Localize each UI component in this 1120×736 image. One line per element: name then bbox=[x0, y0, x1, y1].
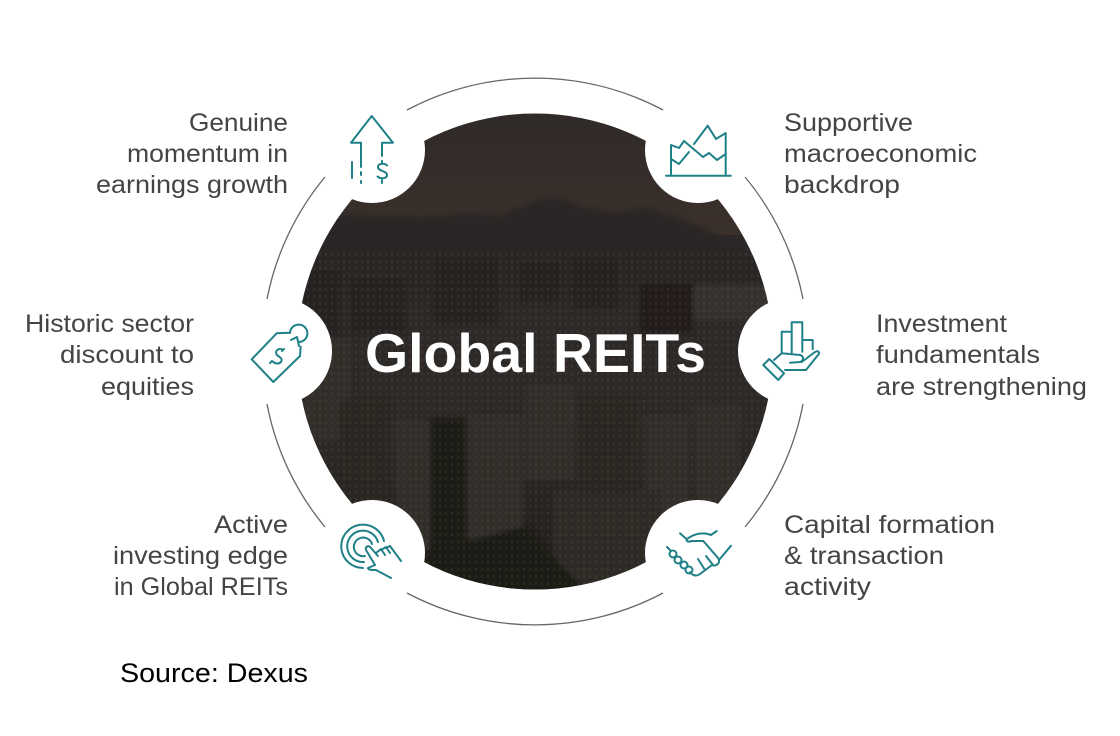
label: capital formation: & transaction bbox=[784, 542, 944, 570]
label: earnings growth: momentum in bbox=[127, 140, 288, 168]
label: active investing: Active bbox=[214, 511, 288, 539]
label: earnings growth: Genuine bbox=[189, 109, 288, 137]
label: investment fundamentals: Investment bbox=[876, 310, 1007, 338]
label: earnings growth: earnings growth bbox=[96, 171, 288, 199]
label: capital formation: activity bbox=[784, 573, 872, 601]
label: macroeconomic backdrop: backdrop bbox=[784, 171, 900, 199]
icon: handshake bbox=[667, 531, 731, 575]
outer ring arcs bbox=[267, 78, 803, 625]
central photo circle bbox=[290, 110, 783, 595]
label: sector discount: equities bbox=[101, 373, 194, 401]
label: macroeconomic backdrop: macroeconomic bbox=[784, 140, 977, 168]
label: macroeconomic backdrop: Supportive bbox=[784, 109, 913, 137]
label: investment fundamentals: are strengthening bbox=[876, 373, 1087, 401]
icon: chart bbox=[666, 126, 731, 176]
label: capital formation bbox=[784, 511, 995, 601]
label: capital formation: Capital formation bbox=[784, 511, 995, 539]
icon: price tag bbox=[252, 325, 307, 382]
label: macroeconomic backdrop bbox=[784, 109, 977, 199]
label: active investing: in Global REITs bbox=[114, 573, 288, 601]
label: sector discount: discount to bbox=[60, 341, 194, 369]
title: Global REITs bbox=[365, 322, 706, 384]
label: sector discount: Historic sector bbox=[25, 310, 194, 338]
label: active investing: investing edge bbox=[113, 542, 288, 570]
label: investment fundamentals bbox=[876, 310, 1087, 401]
label: sector discount bbox=[25, 310, 194, 401]
source note: Source: Dexus bbox=[120, 658, 308, 688]
icon: hand holding chart bbox=[763, 322, 819, 380]
icon: up arrow with dollar bbox=[351, 116, 393, 183]
white notches for icons bbox=[226, 97, 844, 606]
icon: touch target bbox=[341, 525, 401, 578]
label: investment fundamentals: fundamentals bbox=[876, 341, 1040, 369]
label: earnings growth bbox=[96, 109, 288, 199]
label: active investing bbox=[113, 511, 288, 601]
